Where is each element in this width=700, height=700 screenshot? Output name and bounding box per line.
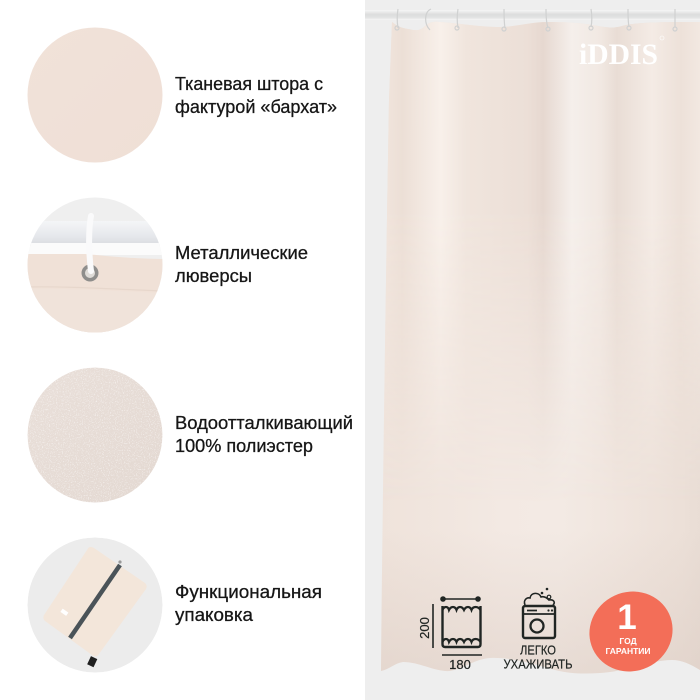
icon: curtain size 180 x 200: 180 — [449, 657, 471, 672]
feature 2 label: Металлические — [175, 243, 308, 263]
feature 1 label: Тканевая штора с — [175, 74, 323, 94]
curtain rail — [365, 10, 700, 20]
icon: washing machine, easy care — [504, 588, 572, 672]
icon: washing machine, easy care: ЛЕГКО — [520, 642, 556, 658]
curtain fabric — [381, 22, 700, 674]
badge: 1 year warranty: 1 — [617, 598, 637, 637]
badge: 1 year warranty: ГАРАНТИИ — [605, 646, 651, 656]
feature 2: metal grommet photo — [27, 197, 163, 333]
icon: washing machine, easy care: УХАЖИВАТЬ — [504, 656, 572, 672]
icon: curtain size 180 x 200: 200 — [417, 617, 432, 639]
feature 3 label: 100% полиэстер — [175, 436, 313, 456]
iDDIS logo: iDDIS — [579, 38, 658, 71]
feature 2 label: люверсы — [175, 266, 252, 286]
feature 1: velvet fabric swatch — [28, 28, 162, 162]
feature 4: packaging bag photo — [28, 538, 162, 672]
feature 3 label — [175, 413, 353, 456]
badge: 1 year warranty: ГОД — [619, 636, 637, 646]
feature 4 label: упаковка — [175, 605, 254, 625]
feature 2 label — [175, 243, 308, 286]
curtain rings — [395, 9, 677, 31]
icon: curtain size 180 x 200 — [417, 596, 482, 672]
feature 3 label: Водоотталкивающий — [175, 413, 353, 433]
panel: curtain photo background — [365, 0, 700, 700]
feature 4 label: Функциональная — [175, 582, 322, 602]
feature 3: water-repellent texture — [27, 367, 163, 503]
feature 4 label — [175, 582, 322, 625]
badge: 1 year warranty — [576, 578, 686, 685]
feature 1 label — [175, 74, 337, 117]
feature 1 label: фактурой «бархат» — [175, 97, 337, 117]
